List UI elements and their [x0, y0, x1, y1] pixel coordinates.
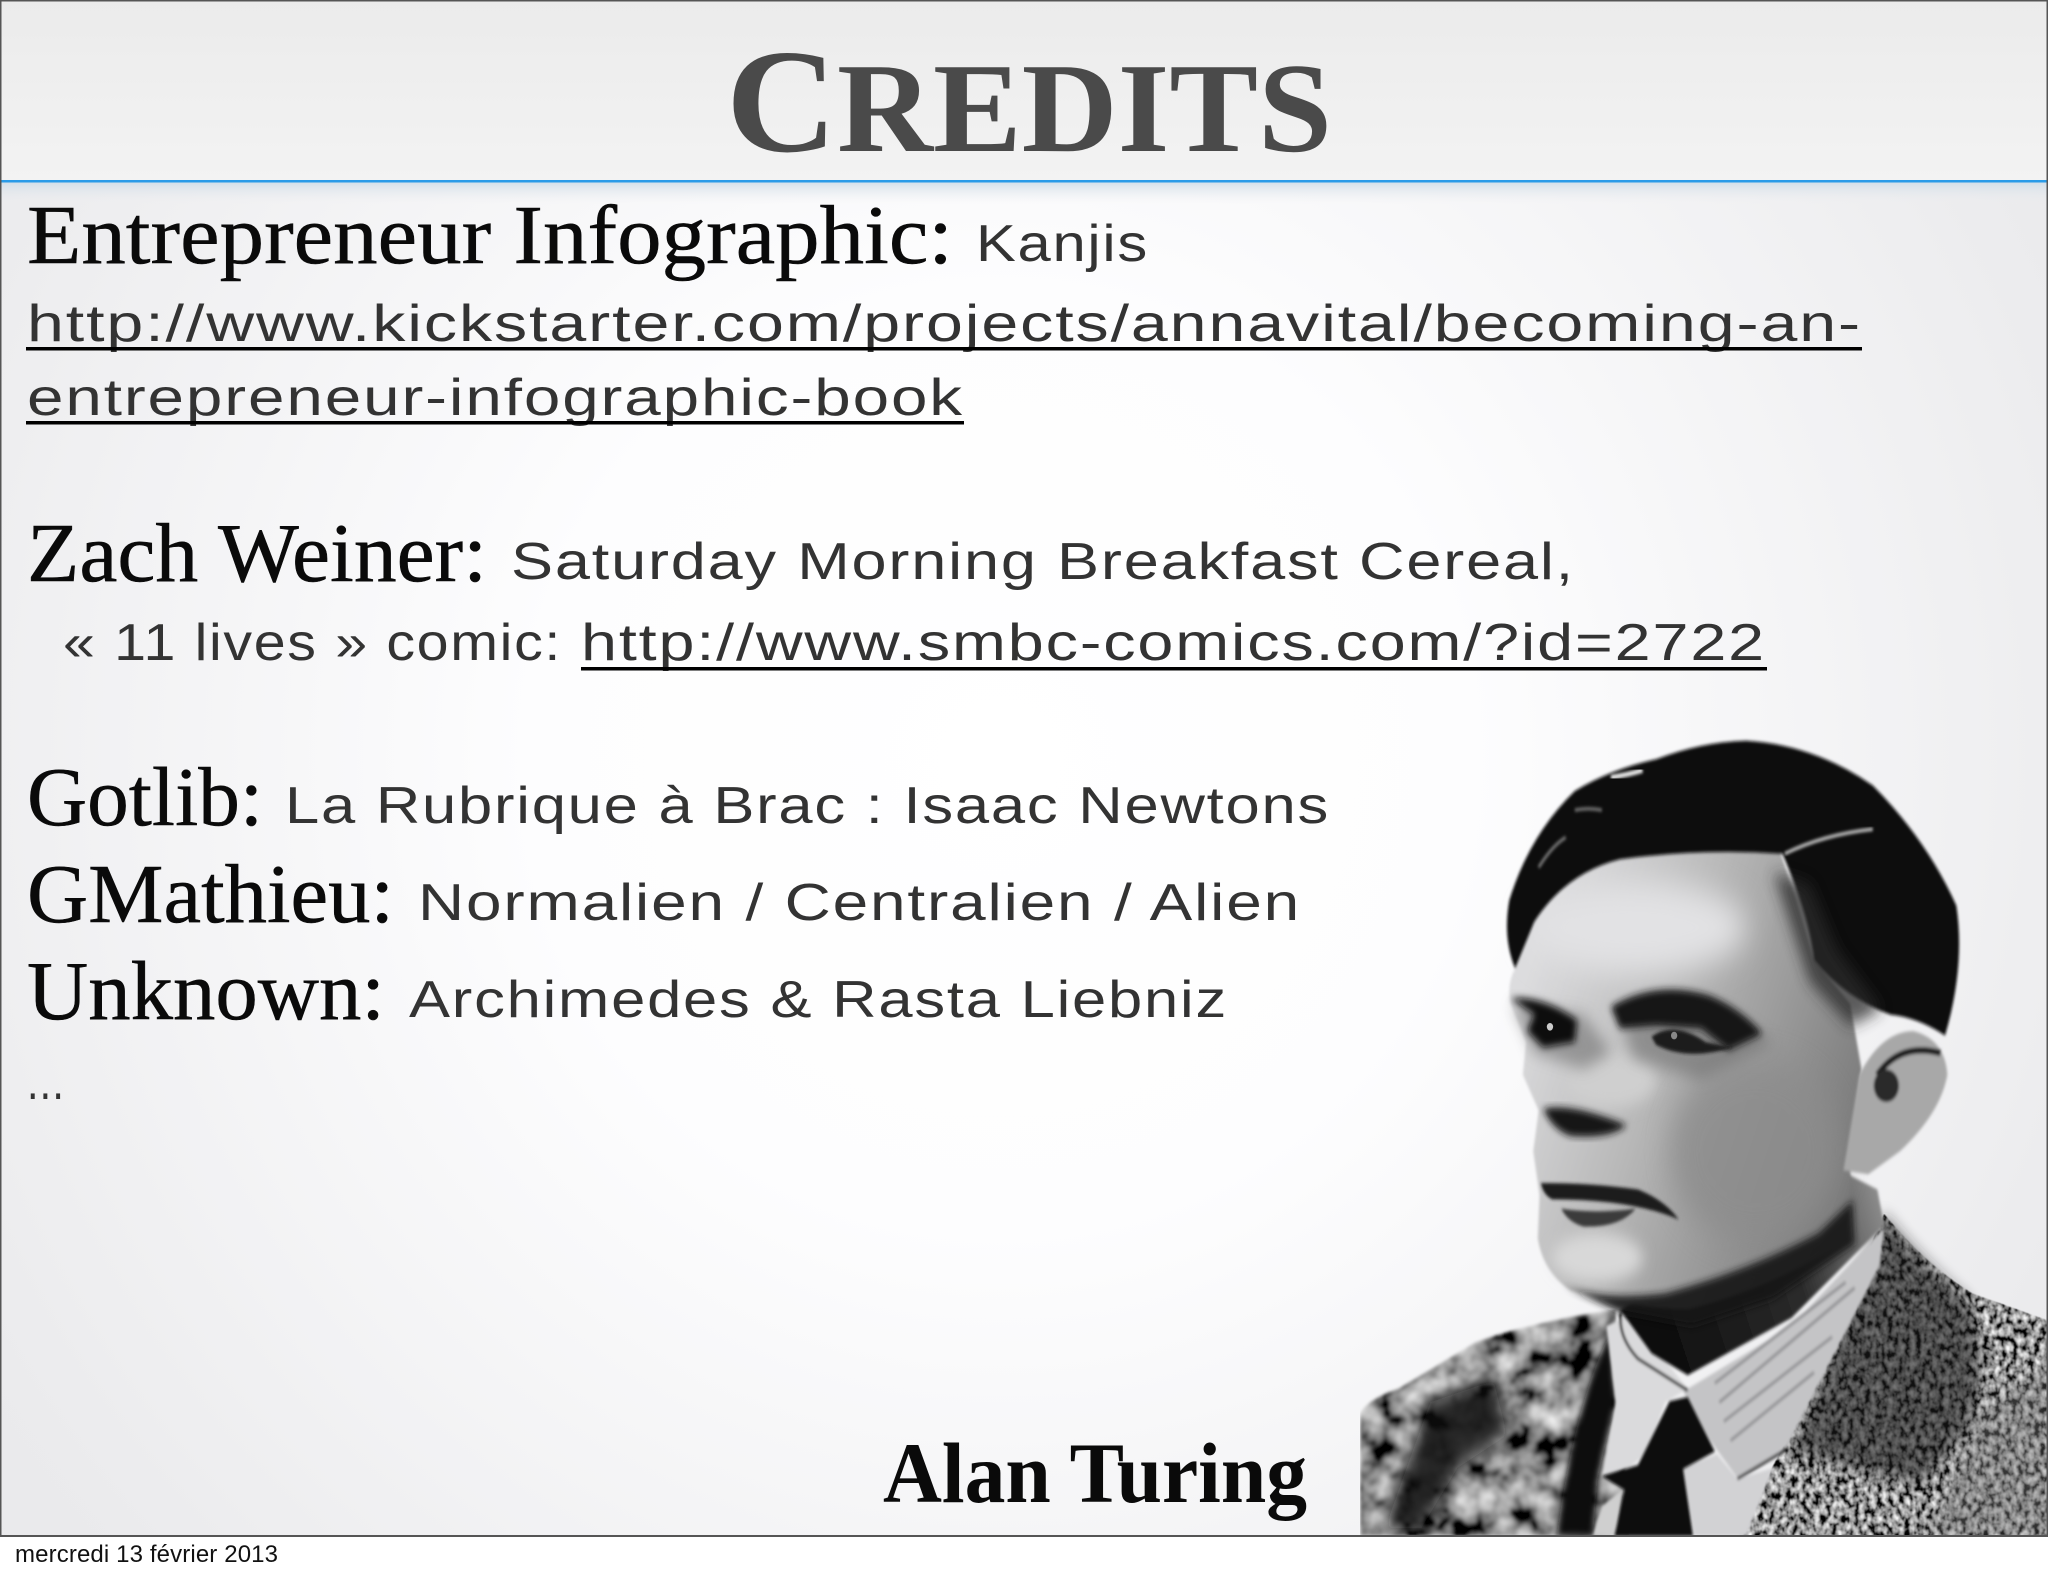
credit: zach weiner [27, 507, 1767, 672]
date footer: mercredi 13 février 2013 [15, 1541, 278, 1568]
credit: gotlib: Gotlib: [27, 751, 263, 844]
credit: unknown [27, 945, 1228, 1038]
link line 2: entrepreneur-infographic-book [27, 369, 964, 427]
forehead highlight [1530, 881, 1746, 974]
right eyebrow and eye [1547, 990, 1762, 1054]
credit: gotlib: La Rubrique à Brac : Isaac Newtons [285, 777, 1330, 835]
ear [1843, 1031, 1947, 1174]
credit: unknown: Unknown: [27, 945, 385, 1038]
face [1509, 843, 1862, 1326]
temple fade [1773, 873, 1882, 1026]
comic label: « 11 lives » comic: [63, 614, 562, 672]
credit source: Saturday Morning Breakfast Cereal, [511, 533, 1575, 591]
left eyebrow and eye [1511, 998, 1577, 1048]
jaw shadow [1561, 1200, 1855, 1326]
shirt and collar [1593, 1228, 1884, 1536]
neck [1620, 1173, 1884, 1375]
portrait: Alan Turing [1360, 741, 2048, 1536]
credit name: Zach Weiner: [27, 507, 487, 600]
link line 1: http://www.kickstarter.com/projects/annavital/becoming-an- [27, 295, 1862, 353]
title: CREDITS [726, 20, 1332, 184]
credit: entrepreneur infographic [26, 189, 1862, 427]
comic link: http://www.smbc-comics.com/?id=2722 [581, 614, 1766, 672]
nose shadow [1543, 1107, 1627, 1137]
credit source: Kanjis [976, 215, 1149, 273]
credit: gotlib [27, 751, 1330, 844]
credit: gmathieu [27, 848, 1301, 941]
portrait caption: Alan Turing [883, 1425, 1307, 1521]
credit: unknown: Archimedes & Rasta Liebniz [409, 971, 1228, 1029]
ellipsis: ... [27, 1053, 65, 1111]
credit name: Entrepreneur Infographic: [27, 189, 953, 282]
cheek shading [1670, 1058, 1841, 1244]
jacket [1360, 1214, 2048, 1536]
header band [0, 0, 2048, 204]
mouth [1541, 1183, 1679, 1227]
credit: gmathieu: GMathieu: [27, 848, 394, 941]
eye sockets [1512, 1004, 1773, 1080]
necktie [1602, 1397, 1715, 1536]
hair [1507, 741, 1959, 1036]
credit: gmathieu: Normalien / Centralien / Alien [418, 874, 1301, 932]
